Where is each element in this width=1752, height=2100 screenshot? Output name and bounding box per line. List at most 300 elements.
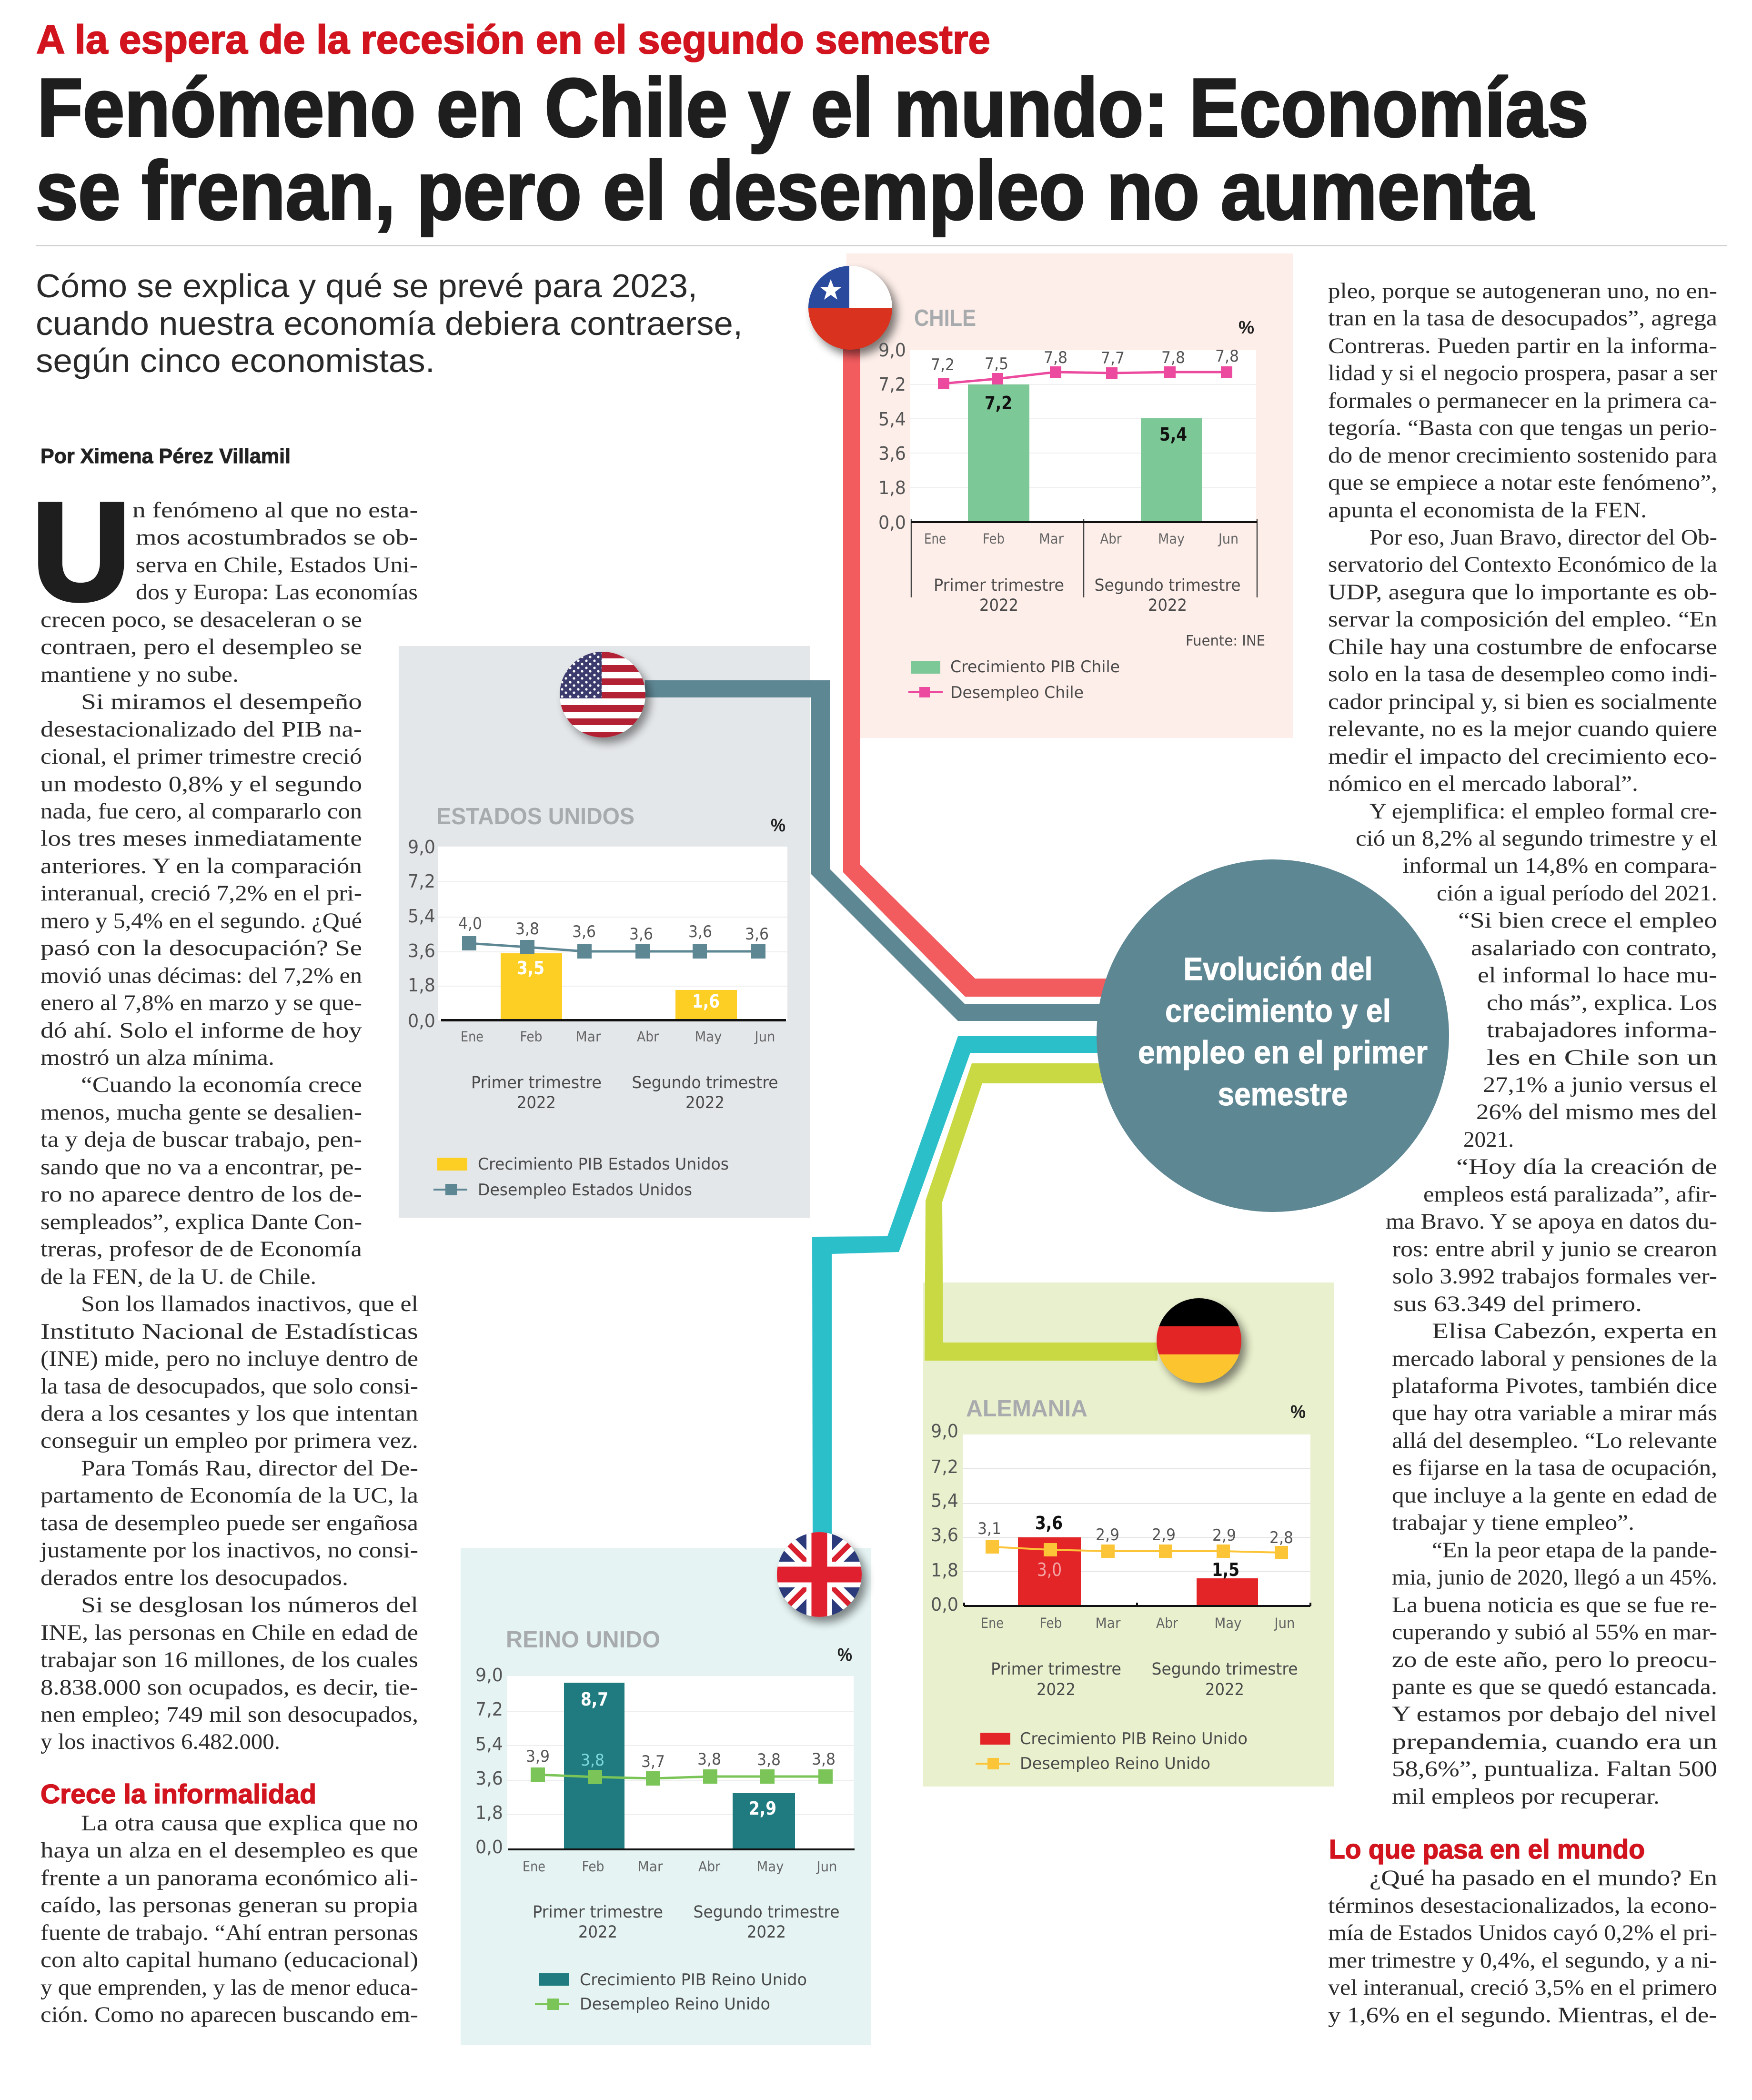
subtitle: Cómo se explica y qué se prevé para 2023, — [36, 267, 697, 304]
article column 1: (INE) mide, pero no incluye dentro de — [40, 1346, 418, 1371]
central circle: Evolución del crecimiento — [1097, 859, 1449, 1212]
y axis labels: 1,8 — [878, 477, 906, 498]
months: Jun — [1274, 1615, 1295, 1631]
article column 1: ta y deja de buscar trabajo, pen- — [40, 1127, 362, 1152]
months — [981, 1615, 1295, 1631]
article column 3 continuation: vel interanual, creció 3,5% en el primero — [1328, 1975, 1717, 2000]
article column 1: ro no aparece dentro de los de- — [40, 1182, 362, 1207]
article column 3: mia, junio de 2020, llegó a un 45%. — [1392, 1565, 1717, 1590]
article column 1: dos y Europa: Las economías — [136, 580, 418, 605]
legend: Crecimiento PIB Reino Unido — [580, 1970, 807, 1989]
article column 3 continuation: ¿Qué ha pasado en el mundo? En — [1369, 1866, 1717, 1890]
line values: 3,8 — [581, 1751, 604, 1770]
bars — [1018, 1537, 1258, 1606]
article column 1 continuation: La otra causa que explica que no — [81, 1811, 418, 1836]
kicker headline: A la espera de la recesión en el segundo semestre — [36, 17, 990, 62]
article column 1 continuation: haya un alza en el desempleo es que — [40, 1838, 418, 1863]
article column 1 continuation: ción. Como no aparecen buscando em- — [40, 2002, 418, 2027]
central circle: Evolución del crecimiento: crecimiento y el — [1165, 993, 1391, 1029]
article column 1: sempleados”, explica Dante Con- — [40, 1210, 362, 1234]
line values: 7,8 — [1161, 348, 1185, 367]
chart title: ALEMANIA — [966, 1396, 1087, 1422]
article column 1 continuation — [40, 1811, 418, 2027]
legend: Desempleo Chile — [950, 683, 1084, 702]
subtitle: según cinco economistas. — [36, 342, 435, 379]
months: Mar — [575, 1029, 601, 1045]
central circle: Evolución del crecimiento: empleo en el primer — [1138, 1034, 1428, 1070]
y axis labels: 0,0 — [475, 1837, 503, 1858]
months: Feb — [983, 531, 1005, 547]
legend — [433, 1155, 729, 1200]
y axis labels: 1,8 — [475, 1802, 503, 1823]
connector: Alemania — [925, 1063, 1158, 1361]
line values: 7,2 — [931, 355, 955, 374]
line values: 3,6 — [688, 922, 712, 941]
panel: Chile background — [846, 253, 1293, 738]
article column 3: es fijarse en la tasa de ocupación, — [1392, 1455, 1717, 1480]
article column 3: mercado laboral y pensiones de la — [1392, 1346, 1717, 1371]
bars — [968, 384, 1202, 522]
bar values: 7,2 — [985, 393, 1012, 414]
connector: Estados Unidos — [645, 680, 1105, 1021]
article column 3: La buena noticia es que se fue re- — [1392, 1593, 1717, 1617]
article column 3: Y ejemplifica: el empleo formal cre- — [1369, 799, 1717, 824]
legend: Crecimiento PIB Estados Unidos — [478, 1155, 729, 1174]
months: May — [1215, 1615, 1241, 1631]
article column 3: “Si bien crece el empleo — [1458, 908, 1717, 933]
article column 3: pleo, porque se autogeneran uno, no en- — [1328, 279, 1717, 303]
article column 3: asalariado con contrato, — [1471, 936, 1717, 960]
panel: Alemania background — [923, 1282, 1334, 1787]
article column 3: que incluye a la gente en edad de — [1392, 1483, 1717, 1508]
chart: Chile — [878, 305, 1265, 702]
article column 1 continuation: frente a un panorama económico ali- — [40, 1866, 418, 1890]
line values: 3,6 — [572, 922, 596, 941]
article column 1: anteriores. Y en la comparación — [40, 854, 362, 878]
article column 3: medir el impacto del crecimiento eco- — [1328, 744, 1717, 769]
quarter labels: Primer trimestre — [533, 1903, 663, 1922]
icon: United Kingdom flag — [774, 1529, 866, 1623]
article column 3: apunta el economista de la FEN. — [1328, 498, 1647, 523]
months: Feb — [1039, 1615, 1062, 1631]
y axis labels: 9,0 — [408, 837, 435, 858]
article column 1: dó ahí. Solo el informe de hoy — [40, 1018, 362, 1043]
line values — [931, 347, 1239, 374]
connector: Chile — [843, 333, 1110, 997]
quarter labels: 2022 — [517, 1093, 556, 1112]
line values — [458, 914, 769, 944]
article column 1: Instituto Nacional de Estadísticas — [40, 1319, 418, 1344]
bar values: 5,4 — [1159, 424, 1187, 445]
bar values — [985, 393, 1187, 445]
percent unit: % — [837, 1645, 852, 1665]
y axis labels — [931, 1421, 958, 1615]
line values: 3,8 — [812, 1750, 836, 1769]
article column 1: partamento de Economía de la UC, la — [40, 1483, 418, 1508]
plot area — [438, 847, 787, 1020]
connector: Reino Unido — [812, 1036, 1105, 1544]
y axis labels: 3,6 — [931, 1525, 958, 1545]
months — [924, 531, 1238, 547]
icon: Chile flag — [805, 262, 897, 355]
unemployment line — [986, 1540, 1288, 1559]
article column 3: solo 3.992 trabajos formales ver- — [1392, 1264, 1717, 1289]
article column 1: desestacionalizado del PIB na- — [40, 717, 362, 742]
article column 1: menos, mucha gente se desalien- — [40, 1100, 362, 1125]
article column 1: sando que no va a encontrar, pe- — [40, 1155, 362, 1180]
article column 3: Y estamos por debajo del nivel — [1392, 1702, 1717, 1726]
quarter labels: 2022 — [1205, 1680, 1244, 1699]
line values: 2,9 — [1096, 1525, 1119, 1545]
main title — [36, 61, 1589, 237]
quarter labels: Primer trimestre — [934, 576, 1064, 595]
article column 1: interanual, creció 7,2% en el pri- — [40, 881, 362, 906]
line values: 7,5 — [985, 354, 1008, 374]
article column 3: servar la composición del empleo. “En — [1328, 607, 1717, 632]
article column 3: prepandemia, cuando era un — [1392, 1729, 1717, 1754]
article column 3: 58,6%”, puntualiza. Faltan 500 — [1392, 1757, 1717, 1781]
legend: Crecimiento PIB Chile — [950, 657, 1120, 676]
axis — [911, 519, 1257, 597]
section heading: Lo que pasa en el mundo: Lo que pasa en el mundo — [1329, 1834, 1645, 1865]
article column 1: mos acostumbrados se ob- — [136, 525, 418, 550]
months — [461, 1029, 775, 1045]
article column 1: nen empleo; 749 mil son desocupados, — [40, 1702, 418, 1727]
line values: 3,9 — [526, 1747, 550, 1766]
article column 1: n fenómeno al que no esta- — [132, 498, 418, 523]
y axis labels: 9,0 — [475, 1665, 503, 1686]
article column 1: crecen poco, se desaceleran o se — [40, 607, 362, 632]
article column 1: nada, fue cero, al compararlo con — [40, 799, 362, 824]
article column 3: formales o permanecer en la primera ca- — [1328, 388, 1717, 413]
article column 1: de la FEN, de la U. de Chile. — [40, 1264, 316, 1289]
months: Ene — [924, 531, 946, 547]
axis — [964, 1603, 1310, 1606]
line values: 7,8 — [1044, 348, 1067, 367]
y axis labels: 7,2 — [931, 1456, 958, 1477]
percent unit: % — [771, 816, 785, 836]
chart: Alemania — [931, 1396, 1310, 1773]
y axis labels — [475, 1665, 503, 1858]
y axis labels — [408, 837, 435, 1031]
y axis labels: 0,0 — [408, 1010, 435, 1031]
article column 3: relevante, no es la mejor cuando quiere — [1328, 717, 1717, 741]
article column 3: lidad y si el negocio prospera, pasar a ser — [1328, 361, 1717, 385]
article column 3: mil empleos por recuperar. — [1392, 1784, 1660, 1809]
quarter labels: Segundo trimestre — [632, 1073, 778, 1092]
months: Abr — [1156, 1615, 1178, 1631]
legend — [976, 1729, 1248, 1773]
article column 1: los tres meses inmediatamente — [40, 826, 362, 851]
article column 1: mantiene y no sube. — [40, 662, 239, 687]
quarter labels — [934, 576, 1240, 615]
article column 3: pante es que se quedó estancada. — [1392, 1675, 1717, 1699]
article column 3: UDP, asegura que lo importante es ob- — [1328, 580, 1717, 605]
y axis labels: 3,6 — [408, 940, 435, 961]
article column 3: cuperando y subió al 55% en mar- — [1392, 1620, 1717, 1645]
months: Ene — [981, 1615, 1004, 1631]
article column 3: 26% del mismo mes del — [1476, 1100, 1717, 1124]
chart title: ESTADOS UNIDOS — [436, 804, 634, 829]
article column 1 continuation: fuente de trabajo. “Ahí entran personas — [40, 1920, 418, 1945]
months: Ene — [461, 1029, 483, 1045]
months: Feb — [520, 1029, 542, 1045]
line values: 3,8 — [697, 1750, 721, 1769]
plot area — [910, 350, 1256, 522]
article column 1 continuation: caído, las personas generan su propia — [40, 1893, 418, 1918]
months: Jun — [754, 1029, 775, 1045]
icon: United States flag — [557, 650, 650, 743]
quarter labels: 2022 — [578, 1923, 617, 1942]
article column 1 continuation: y que emprenden, y las de menor educa- — [40, 1975, 418, 2000]
line values: 7,8 — [1215, 347, 1239, 366]
article column 1: conseguir un empleo por primera vez. — [40, 1428, 418, 1453]
quarter labels: Segundo trimestre — [1152, 1660, 1298, 1679]
bar values — [581, 1689, 776, 1819]
article column 1: pasó con la desocupación? Se — [40, 936, 362, 960]
article column 3: do de menor crecimiento sostenido para — [1328, 443, 1717, 468]
central circle: Evolución del crecimiento: semestre — [1218, 1076, 1348, 1112]
quarter labels: Primer trimestre — [471, 1073, 602, 1092]
bar values: 3,0 — [1037, 1559, 1062, 1580]
article column 3: Elisa Cabezón, experta en — [1432, 1319, 1717, 1343]
bar values: 1,5 — [1212, 1559, 1239, 1580]
article column 1: movió unas décimas: del 7,2% en — [40, 963, 362, 988]
line values — [526, 1747, 836, 1771]
line values: 3,6 — [745, 925, 769, 944]
y axis labels: 1,8 — [408, 975, 435, 996]
panel: Estados Unidos background — [399, 646, 810, 1218]
y axis labels: 7,2 — [475, 1699, 503, 1720]
months: Abr — [1100, 531, 1122, 547]
article column 1: Para Tomás Rau, director del De- — [81, 1456, 418, 1481]
article column 3 continuation: mer trimestre y 0,4%, el segundo, y a ni- — [1328, 1948, 1717, 1973]
article column 1 — [40, 498, 418, 1754]
unemployment line — [531, 1767, 833, 1786]
bars — [564, 1683, 795, 1849]
y axis labels: 7,2 — [408, 871, 435, 892]
percent unit: % — [1290, 1402, 1306, 1422]
central circle: Evolución del crecimiento: Evolución del — [1183, 951, 1373, 987]
article column 3: “En la peor etapa de la pande- — [1432, 1538, 1717, 1563]
months — [523, 1858, 837, 1875]
line values: 3,1 — [977, 1519, 1001, 1538]
article column 1: Son los llamados inactivos, que el — [81, 1292, 418, 1316]
article column 3: ción a igual período del 2021. — [1437, 881, 1717, 906]
months: May — [1158, 531, 1185, 547]
bar values: 3,6 — [1035, 1513, 1063, 1534]
line values: 2,9 — [1152, 1525, 1176, 1545]
article column 1: dera a los cesantes y los que intentan — [40, 1401, 418, 1426]
article column 3: allá del desempleo. “Lo relevante — [1392, 1428, 1717, 1453]
subtitle: cuando nuestra economía debiera contraerse, — [36, 305, 743, 342]
months: Mar — [637, 1858, 663, 1875]
article column 3: cho más”, explica. Los — [1487, 990, 1717, 1015]
axis — [441, 1019, 786, 1021]
panel: Reino Unido background — [461, 1548, 871, 2045]
unemployment line — [462, 936, 765, 959]
line values: 4,0 — [458, 914, 482, 933]
article column 1: Si se desglosan los números del — [81, 1593, 418, 1617]
legend: Crecimiento PIB Reino Unido — [1020, 1729, 1248, 1748]
line values: 3,8 — [515, 919, 539, 939]
drop cap U: U — [32, 475, 130, 629]
source: Fuente: INE — [1186, 633, 1265, 649]
article column 1: INE, las personas en Chile en edad de — [40, 1620, 418, 1645]
bars — [501, 953, 737, 1020]
chart: Reino Unido — [475, 1627, 855, 2014]
line values: 7,7 — [1101, 349, 1125, 368]
article column 1: tasa de desempleo puede ser engañosa — [40, 1511, 418, 1535]
y axis labels: 5,4 — [931, 1490, 958, 1511]
y axis labels: 5,4 — [475, 1734, 503, 1755]
article column 1: “Cuando la economía crece — [81, 1072, 362, 1097]
article column 3: “Hoy día la creación de — [1456, 1154, 1717, 1179]
article column 1: cional, el primer trimestre creció — [40, 744, 362, 769]
article column 3: zo de este año, pero lo preocu- — [1392, 1647, 1717, 1672]
article column 3: Contreras. Pueden partir en la informa- — [1328, 333, 1717, 358]
bar values — [517, 958, 720, 1012]
legend — [908, 657, 1120, 702]
months: Jun — [1218, 531, 1238, 547]
article column 3: ros: entre abril y junio se crearon — [1392, 1237, 1717, 1262]
article column 1: mostró un alza mínima. — [40, 1045, 274, 1070]
months: Abr — [698, 1858, 720, 1875]
article column 3: Por eso, Juan Bravo, director del Ob- — [1369, 525, 1717, 550]
article column 3: que se empiece a notar este fenómeno”, — [1328, 470, 1717, 495]
article column 3: informal un 14,8% en compara- — [1402, 853, 1717, 878]
quarter labels: 2022 — [685, 1093, 725, 1112]
article column 1: justamente por los inactivos, no consi- — [40, 1538, 418, 1563]
axis — [508, 1848, 855, 1850]
article column 3: Chile hay una costumbre de enfocarse — [1328, 635, 1717, 659]
y axis labels: 3,6 — [878, 443, 906, 464]
article column 1: derados entre los desocupados. — [40, 1565, 348, 1590]
quarter labels: 2022 — [747, 1923, 786, 1942]
quarter labels — [471, 1073, 778, 1112]
article column 3: 27,1% a junio versus el — [1483, 1072, 1717, 1097]
y axis labels: 5,4 — [408, 906, 435, 927]
bar values: 1,6 — [692, 991, 720, 1012]
line values: 3,7 — [641, 1752, 665, 1771]
y axis labels: 7,2 — [878, 374, 906, 395]
chart: Estados Unidos — [408, 804, 787, 1200]
article column 3: trabajadores informa- — [1487, 1018, 1717, 1042]
quarter labels: Segundo trimestre — [1095, 576, 1240, 595]
bar values: 3,5 — [517, 958, 544, 979]
article column 1: y los inactivos 6.482.000. — [40, 1729, 280, 1754]
article column 3: les en Chile son un — [1487, 1045, 1717, 1070]
article column 3: sus 63.349 del primero. — [1393, 1292, 1642, 1316]
quarter labels: 2022 — [979, 596, 1018, 615]
y axis labels: 9,0 — [878, 340, 906, 361]
line values: 2,8 — [1269, 1528, 1293, 1547]
article column 3 continuation: y 1,6% en el segundo. Mientras, el de- — [1328, 2003, 1717, 2028]
main title: se frenan, pero el desempleo no aumenta — [36, 144, 1534, 237]
article column 1: Si miramos el desempeño — [81, 689, 362, 714]
percent unit: % — [1238, 318, 1254, 338]
legend — [535, 1970, 807, 2014]
y axis labels: 1,8 — [931, 1560, 958, 1581]
article column 3 continuation — [1328, 1866, 1717, 2028]
article column 3: plataforma Pivotes, también dice — [1392, 1373, 1717, 1398]
article column 3: nómico en el mercado laboral”. — [1328, 771, 1638, 796]
article column 1: mero y 5,4% en el segundo. ¿Qué — [40, 909, 362, 933]
line values — [977, 1519, 1293, 1547]
quarter labels — [991, 1660, 1298, 1699]
article column 3: ma Bravo. Y se apoya en datos du- — [1386, 1209, 1717, 1234]
line values: 3,6 — [629, 925, 653, 944]
y axis labels: 3,6 — [475, 1768, 503, 1789]
months: Mar — [1039, 531, 1064, 547]
article column 3: tran en la tasa de desocupados”, agrega — [1328, 306, 1717, 331]
bar values: 2,9 — [749, 1798, 776, 1819]
article column 1 continuation: con alto capital humano (educacional) — [40, 1948, 418, 1972]
subtitle — [36, 267, 743, 379]
article column 3: empleos está paralizada”, afir- — [1423, 1182, 1717, 1207]
y axis labels: 9,0 — [931, 1421, 958, 1442]
article column 3: trabajar y tiene empleo”. — [1392, 1510, 1634, 1535]
section heading: Crece la informalidad: Crece la informalidad — [40, 1779, 316, 1809]
article column 3: el informal lo hace mu- — [1478, 963, 1717, 988]
article column 3 continuation: mía de Estados Unidos cayó 0,2% el pri- — [1328, 1920, 1717, 1945]
article column 3: cador principal y, si bien es socialmente — [1328, 689, 1717, 714]
byline: Por Ximena Pérez Villamil — [40, 444, 291, 468]
legend: Desempleo Estados Unidos — [478, 1181, 692, 1200]
months: May — [695, 1029, 722, 1045]
article column 3 — [1328, 279, 1717, 1809]
y axis labels: 0,0 — [931, 1594, 958, 1615]
chart title: REINO UNIDO — [506, 1627, 660, 1653]
quarter labels: 2022 — [1037, 1680, 1076, 1699]
article column 1: enero al 7,8% en marzo y se que- — [40, 990, 362, 1015]
bar values: 8,7 — [581, 1689, 608, 1710]
months: May — [756, 1858, 784, 1875]
article column 1: serva en Chile, Estados Uni- — [136, 553, 418, 577]
chart title: CHILE — [914, 305, 976, 331]
article column 1: contraen, pero el desempleo se — [40, 635, 362, 659]
article column 1: un modesto 0,8% y el segundo — [40, 772, 362, 797]
line values: 3,8 — [757, 1750, 781, 1769]
article column 1: treras, profesor de de Economía — [40, 1237, 362, 1262]
quarter labels: 2022 — [1148, 596, 1187, 615]
y axis labels — [878, 340, 906, 533]
article column 3: tegoría. “Basta con que tengas un perio- — [1328, 415, 1717, 440]
months: Mar — [1096, 1615, 1121, 1631]
unemployment line — [938, 366, 1232, 389]
legend: Desempleo Reino Unido — [580, 1995, 770, 2014]
article column 3: ció un 8,2% al segundo trimestre y el — [1356, 826, 1717, 851]
article column 3: solo en la tasa de desempleo como indi- — [1328, 662, 1717, 687]
article column 1: 8.838.000 son ocupados, es decir, tie- — [40, 1675, 418, 1700]
article column 1: trabajar son 16 millones, de los cuales — [40, 1647, 418, 1672]
months: Abr — [637, 1029, 659, 1045]
y axis labels: 5,4 — [878, 409, 906, 430]
main title: Fenómeno en Chile y el mundo: Economías — [37, 61, 1589, 154]
quarter labels — [533, 1903, 839, 1942]
article column 3: servatorio del Contexto Económico de la — [1328, 552, 1717, 577]
quarter labels: Primer trimestre — [991, 1660, 1121, 1679]
quarter labels: Segundo trimestre — [694, 1903, 839, 1922]
article column 3: 2021. — [1463, 1127, 1514, 1152]
article column 3: que hay otra variable a mirar más — [1392, 1401, 1717, 1425]
y axis labels: 0,0 — [878, 512, 906, 533]
months: Feb — [582, 1858, 604, 1875]
months: Ene — [523, 1858, 545, 1875]
article column 1: la tasa de desocupados, que solo consi- — [40, 1374, 418, 1399]
plot area — [963, 1434, 1310, 1606]
plot area — [507, 1676, 854, 1849]
